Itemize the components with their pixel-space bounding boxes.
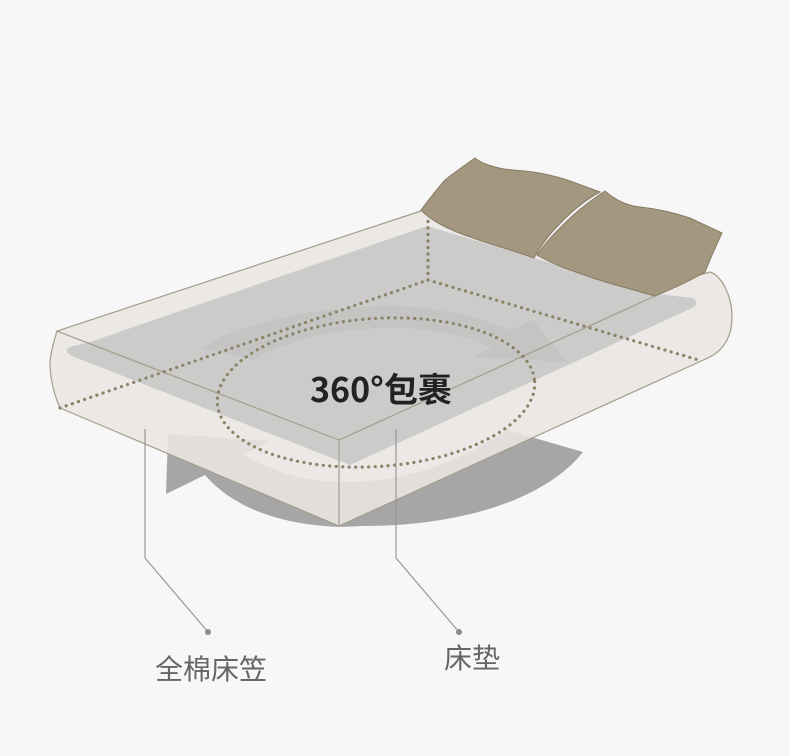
pillow left [421, 158, 600, 258]
fitted sheet body [50, 211, 732, 526]
leader line: fitted sheet [145, 429, 211, 635]
mattress [67, 226, 696, 465]
rotation arrow on top face [202, 306, 567, 362]
sheet outline edges [50, 211, 732, 526]
pillow right [537, 191, 722, 296]
label: fitted sheet: 全棉床笠 [155, 648, 267, 688]
leader line: mattress [396, 429, 462, 635]
dotted circle [212, 308, 540, 477]
title: 360 wrap: 360°包裹 [310, 363, 452, 412]
label: mattress: 床垫 [444, 637, 500, 677]
shadow arrow under the bed [166, 430, 583, 527]
hidden edges dotted lines [60, 216, 702, 408]
